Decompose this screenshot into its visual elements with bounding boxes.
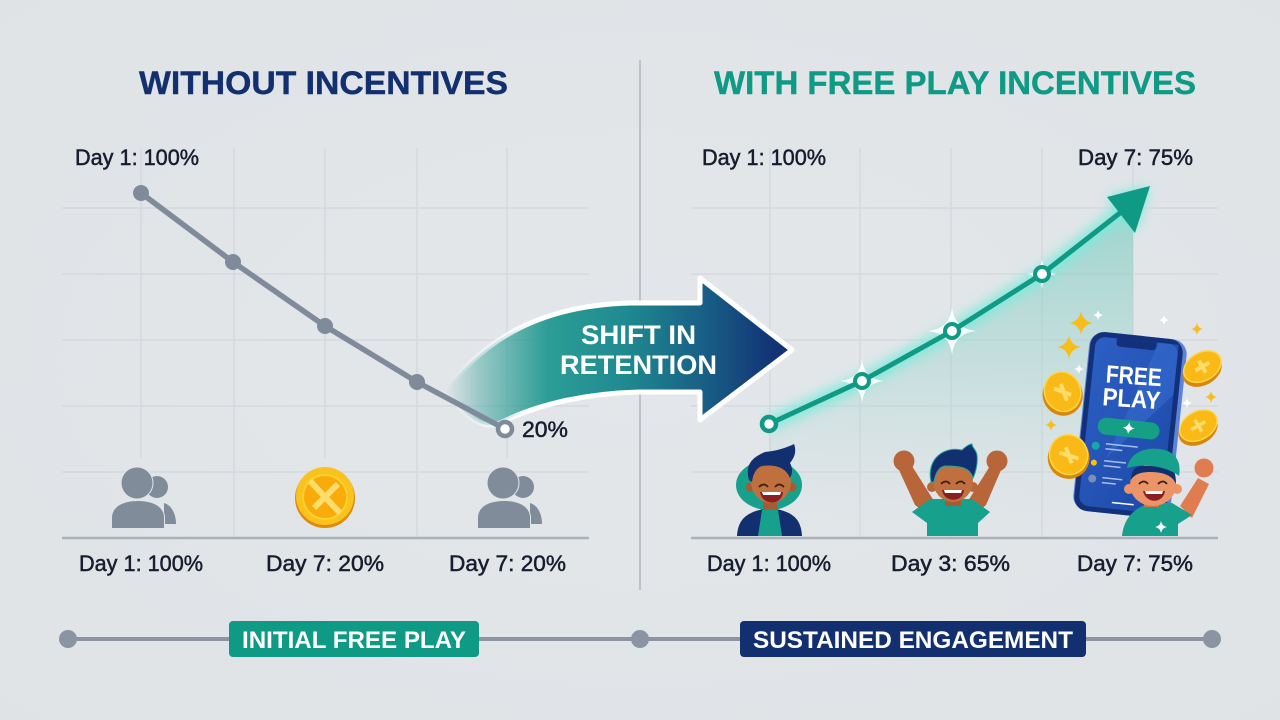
heading: with free play incentives: WITH FREE PLAY INCENTIVES xyxy=(714,65,1196,101)
icon: users day 1 xyxy=(112,468,176,528)
illustration: free play phone with coins xyxy=(1036,310,1229,536)
badge: sustained engagement xyxy=(740,621,1086,657)
gold coins xyxy=(1036,345,1229,485)
phone text line two: PLAY xyxy=(1102,383,1162,415)
arrow text xyxy=(560,320,717,380)
timeline xyxy=(59,621,1221,657)
panel: with incentives chart xyxy=(691,145,1218,538)
badge: initial free play xyxy=(229,621,479,657)
axis labels: left chart: Day 7: 20% xyxy=(266,551,384,576)
axis labels: right chart: Day 7: 75% xyxy=(1077,551,1193,576)
shaded area under growth line xyxy=(769,200,1133,530)
axis labels: right chart: Day 1: 100% xyxy=(707,551,831,576)
axis labels: right chart xyxy=(707,551,1193,576)
badge: initial free play: INITIAL FREE PLAY xyxy=(242,627,466,654)
label: day 1 top right: Day 1: 100% xyxy=(702,145,826,170)
icon: users day 7 xyxy=(478,468,542,528)
label: day 7 top right: Day 7: 75% xyxy=(1078,145,1193,170)
arrow: shift in retention xyxy=(443,278,792,425)
end point label: 20 percent: 20% xyxy=(522,417,568,442)
axis labels: left chart: Day 7: 20% xyxy=(449,551,566,576)
cheering person with cap xyxy=(1122,449,1214,536)
illustration: smiling person day 1 xyxy=(736,444,802,536)
axis labels: left chart xyxy=(79,551,566,576)
axis labels: left chart: Day 1: 100% xyxy=(79,551,203,576)
declining retention line xyxy=(133,185,512,436)
icon: crossed coin xyxy=(295,467,355,528)
arrow text: RETENTION xyxy=(560,350,717,380)
heading: without incentives: WITHOUT INCENTIVES xyxy=(139,65,508,101)
phone xyxy=(1072,331,1188,520)
arrow text: SHIFT IN xyxy=(581,320,696,350)
center divider xyxy=(639,60,641,590)
illustration: cheering person day 3 xyxy=(894,444,1008,536)
left chart grid xyxy=(62,148,589,538)
rising retention line with glow and arrow xyxy=(762,186,1150,431)
badge: sustained engagement: SUSTAINED ENGAGEMENT xyxy=(753,627,1073,654)
right chart grid xyxy=(691,148,1218,538)
axis labels: right chart: Day 3: 65% xyxy=(891,551,1010,576)
label: day 1 top left: Day 1: 100% xyxy=(75,145,199,170)
sparkles xyxy=(1045,310,1217,431)
phone text: FREE xyxy=(1105,360,1163,392)
